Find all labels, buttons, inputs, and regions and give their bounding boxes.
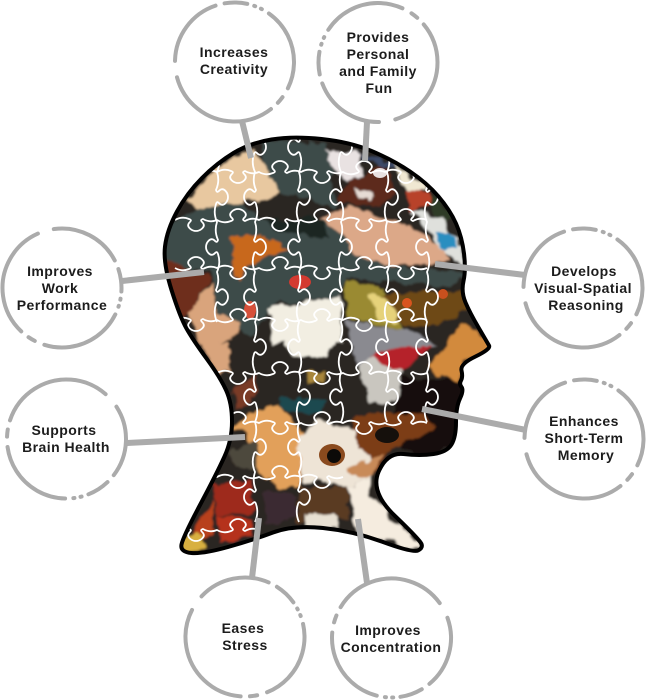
label: Memory [558, 447, 614, 463]
dashed ring [523, 378, 645, 500]
dashed ring [161, 553, 329, 700]
dashed ring [0, 357, 149, 521]
dashed ring [522, 227, 644, 349]
creature eyes [244, 168, 448, 466]
label: and Family [339, 63, 417, 79]
label: Eases [222, 620, 264, 636]
dashed ring [173, 1, 296, 123]
dashed ring [316, 562, 467, 700]
head silhouette with jigsaw collage [162, 136, 492, 556]
label: Fun [365, 80, 393, 96]
dashed ring [318, 2, 438, 123]
connector: Increases Creativity [242, 121, 251, 158]
circle: Develops Visual-Spatial Reasoning [522, 227, 644, 349]
label: Personal [347, 46, 409, 62]
circle: Improves Work Performance [0, 221, 129, 355]
label: Visual-Spatial [534, 280, 632, 296]
label: Provides [347, 29, 409, 45]
label: Stress [222, 637, 268, 653]
circle: Improves Concentration [316, 562, 467, 700]
label: Work [42, 280, 78, 296]
jigsaw piece lines [175, 122, 438, 541]
connector: Provides Personal and Family Fun [365, 122, 367, 161]
circle: Increases Creativity [173, 1, 296, 123]
label: Reasoning [548, 297, 624, 313]
label: Improves [27, 263, 93, 279]
label: Enhances [549, 413, 619, 429]
label: Supports [31, 422, 97, 438]
label: Improves [355, 622, 421, 638]
connector: Develops Visual-Spatial Reasoning [435, 264, 525, 275]
label: Brain Health [22, 439, 110, 455]
connector: Enhances Short-Term Memory [422, 409, 526, 430]
connector: Eases Stress [252, 518, 259, 578]
connector: Supports Brain Health [127, 437, 245, 443]
dashed ring [0, 221, 129, 355]
label: Creativity [200, 61, 268, 77]
connector: Improves Work Performance [122, 272, 204, 281]
label: Short-Term [545, 430, 623, 446]
circle: Eases Stress [161, 553, 329, 700]
collage image regions [166, 140, 488, 552]
label: Performance [17, 297, 107, 313]
connector: Improves Concentration [358, 519, 367, 583]
head outline [165, 138, 489, 553]
label: Increases [200, 44, 268, 60]
circle: Supports Brain Health [0, 357, 149, 521]
circle: Provides Personal and Family Fun [318, 2, 438, 123]
label: Develops [551, 263, 617, 279]
label: Concentration [341, 639, 441, 655]
circle: Enhances Short-Term Memory [523, 378, 645, 500]
